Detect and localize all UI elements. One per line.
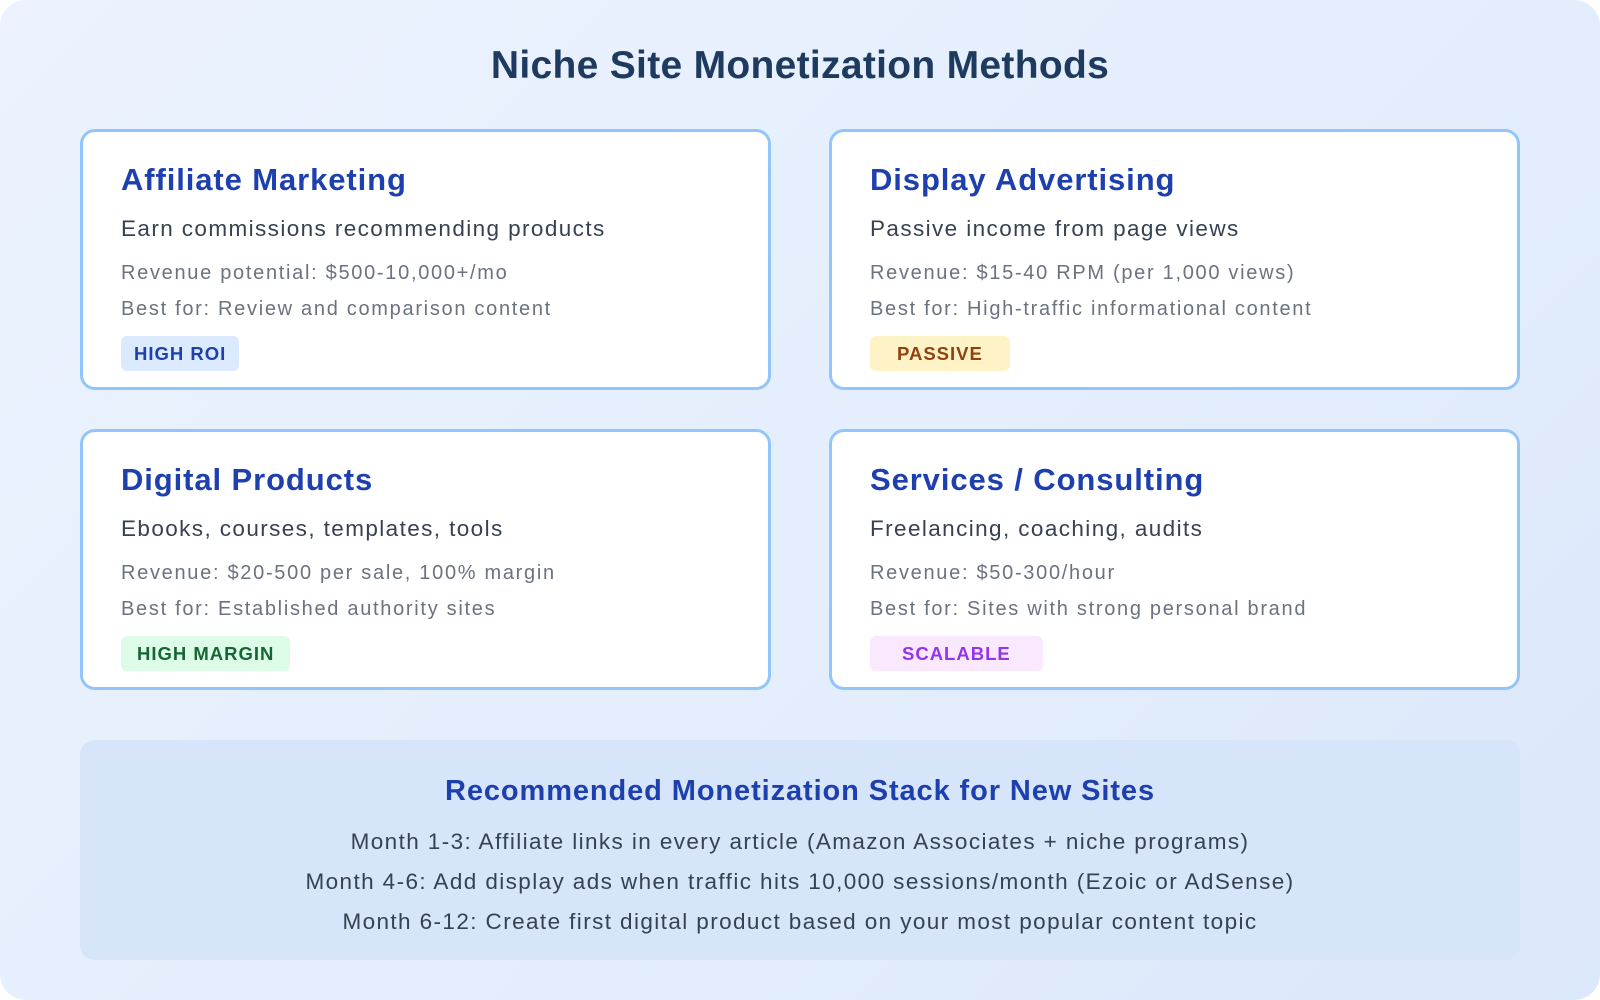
text: services best for: Best for: Sites with strong personal brand bbox=[870, 598, 1307, 620]
badge: scalable bbox=[870, 636, 1043, 671]
text: services description: Freelancing, coaching, audits bbox=[870, 516, 1203, 541]
heading: recommended stack: Recommended Monetization Stack for New Sites bbox=[445, 775, 1155, 807]
text: digital description: Ebooks, courses, templates, tools bbox=[121, 516, 504, 541]
badge: high margin bbox=[121, 636, 290, 671]
panel: services consulting bbox=[829, 429, 1520, 690]
heading: display: Display Advertising bbox=[870, 162, 1175, 197]
panel: display advertising bbox=[829, 129, 1520, 390]
badge: scalable: SCALABLE bbox=[902, 643, 1011, 664]
text: display description: Passive income from page views bbox=[870, 216, 1240, 241]
text: digital revenue: Revenue: $20-500 per sale, 100% margin bbox=[121, 562, 556, 584]
badge: high roi bbox=[121, 336, 239, 371]
badge: high margin: HIGH MARGIN bbox=[137, 643, 274, 664]
text: month 4-6: Month 4-6: Add display ads when traffic hits 10,000 sessions/month (Ezoic or AdSense) bbox=[305, 869, 1295, 894]
text: display revenue: Revenue: $15-40 RPM (per 1,000 views) bbox=[870, 262, 1295, 284]
text: month 1-3: Month 1-3: Affiliate links in every article (Amazon Associates + niche programs) bbox=[351, 829, 1249, 854]
text: display best for: Best for: High-traffic informational content bbox=[870, 298, 1312, 320]
badge: passive bbox=[870, 336, 1010, 371]
text: month 6-12: Month 6-12: Create first digital product based on your most popular content topic bbox=[342, 909, 1258, 934]
panel: recommended stack bbox=[80, 740, 1520, 960]
heading: services: Services / Consulting bbox=[870, 462, 1204, 497]
text: digital best for: Best for: Established authority sites bbox=[121, 598, 496, 620]
text: affiliate description: Earn commissions recommending products bbox=[121, 216, 606, 241]
text: affiliate revenue: Revenue potential: $500-10,000+/mo bbox=[121, 262, 508, 284]
heading: affiliate: Affiliate Marketing bbox=[121, 162, 407, 197]
panel: affiliate marketing bbox=[80, 129, 771, 390]
text: services revenue: Revenue: $50-300/hour bbox=[870, 562, 1116, 584]
heading: digital products: Digital Products bbox=[121, 462, 373, 497]
badge: passive: PASSIVE bbox=[897, 343, 983, 364]
panel: digital products bbox=[80, 429, 771, 690]
title: Niche Site Monetization Methods bbox=[491, 44, 1109, 87]
text: affiliate best for: Best for: Review and comparison content bbox=[121, 298, 552, 320]
badge: high roi: HIGH ROI bbox=[134, 343, 226, 364]
